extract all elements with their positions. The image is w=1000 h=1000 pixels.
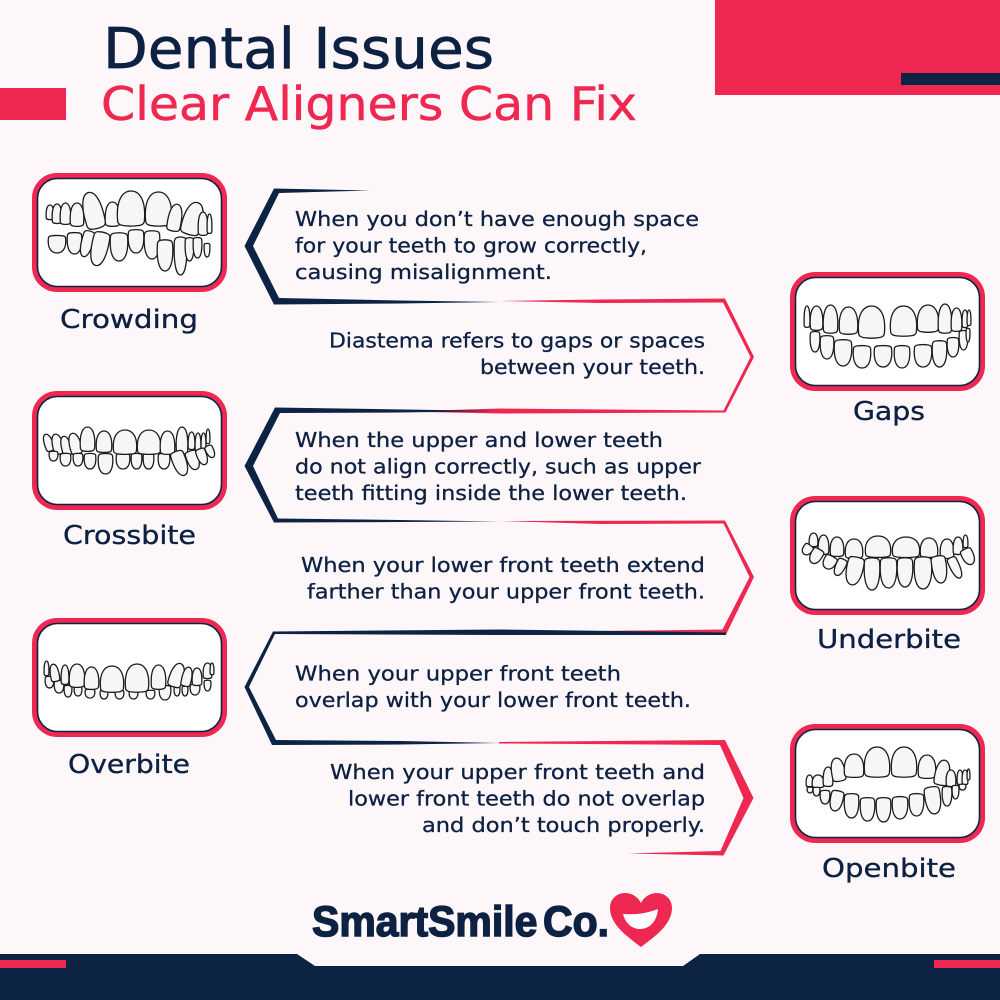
gaps teeth <box>804 304 971 368</box>
crowding teeth <box>46 190 212 275</box>
gaps label: Gaps <box>853 397 925 427</box>
title: Dental Issues <box>103 17 494 82</box>
panel: underbite <box>790 496 985 655</box>
arrow: crowding callout <box>244 188 499 304</box>
footer band <box>0 954 1000 1000</box>
arrow: underbite callout <box>499 520 754 634</box>
arrow: crossbite callout <box>244 408 499 522</box>
logo wordmark: SmartSmile Co. <box>312 898 609 946</box>
text: openbite description: and don’t touch properly. <box>422 813 705 837</box>
text: crowding description: for your teeth to grow correctly, <box>295 234 647 258</box>
text: crowding description <box>295 207 699 284</box>
text: gaps description: Diastema refers to gaps or spaces <box>329 328 705 352</box>
text: openbite description <box>330 760 705 837</box>
text: gaps description <box>329 328 705 379</box>
openbite label: Openbite <box>822 854 956 884</box>
logo <box>312 893 672 947</box>
text: overbite description: When your upper front teeth <box>295 662 621 686</box>
gaps frame <box>790 272 985 391</box>
arrow: gaps callout <box>400 298 754 414</box>
text: openbite description: When your upper front teeth and <box>330 760 705 784</box>
left decorative block <box>0 88 66 120</box>
panel: crossbite <box>32 391 227 551</box>
icon: heart with smile <box>610 893 672 947</box>
title <box>101 17 637 131</box>
crowding label: Crowding <box>60 305 198 335</box>
text: crowding description: When you don’t have enough space <box>295 207 699 231</box>
overbite teeth <box>44 661 214 700</box>
underbite frame <box>790 496 985 615</box>
text: crossbite description: When the upper and lower teeth <box>295 428 663 452</box>
panel: overbite <box>32 618 227 780</box>
crossbite frame <box>32 391 227 510</box>
text: underbite description: farther than your upper front teeth. <box>307 580 705 604</box>
arrow: openbite callout <box>499 740 754 856</box>
arrow: overbite callout <box>244 630 726 745</box>
title: Clear Aligners Can Fix <box>101 77 637 131</box>
text: crossbite description: teeth fitting inside the lower teeth. <box>295 481 687 505</box>
underbite label: Underbite <box>817 625 961 655</box>
text: openbite description: lower front teeth do not overlap <box>348 786 705 810</box>
openbite teeth <box>806 747 970 822</box>
crowding frame <box>32 173 227 292</box>
text: crowding description: causing misalignment. <box>295 260 552 284</box>
text: crossbite description <box>295 428 702 505</box>
text: overbite description <box>295 662 691 712</box>
text: overbite description: overlap with your lower front teeth. <box>295 688 691 712</box>
crossbite label: Crossbite <box>63 521 196 551</box>
text: crossbite description: do not align correctly, such as upper <box>295 454 702 478</box>
text: underbite description: When your lower front teeth extend <box>301 553 705 577</box>
openbite frame <box>790 724 985 843</box>
overbite frame <box>32 618 227 737</box>
underbite teeth <box>800 533 977 590</box>
overbite label: Overbite <box>68 750 190 780</box>
text: gaps description: between your teeth. <box>480 355 705 379</box>
panel: gaps <box>790 272 985 427</box>
panel: openbite <box>790 724 985 884</box>
top right decorative block <box>715 0 1000 95</box>
crossbite teeth <box>41 427 216 478</box>
panel: crowding <box>32 173 227 335</box>
text: underbite description <box>301 553 705 604</box>
